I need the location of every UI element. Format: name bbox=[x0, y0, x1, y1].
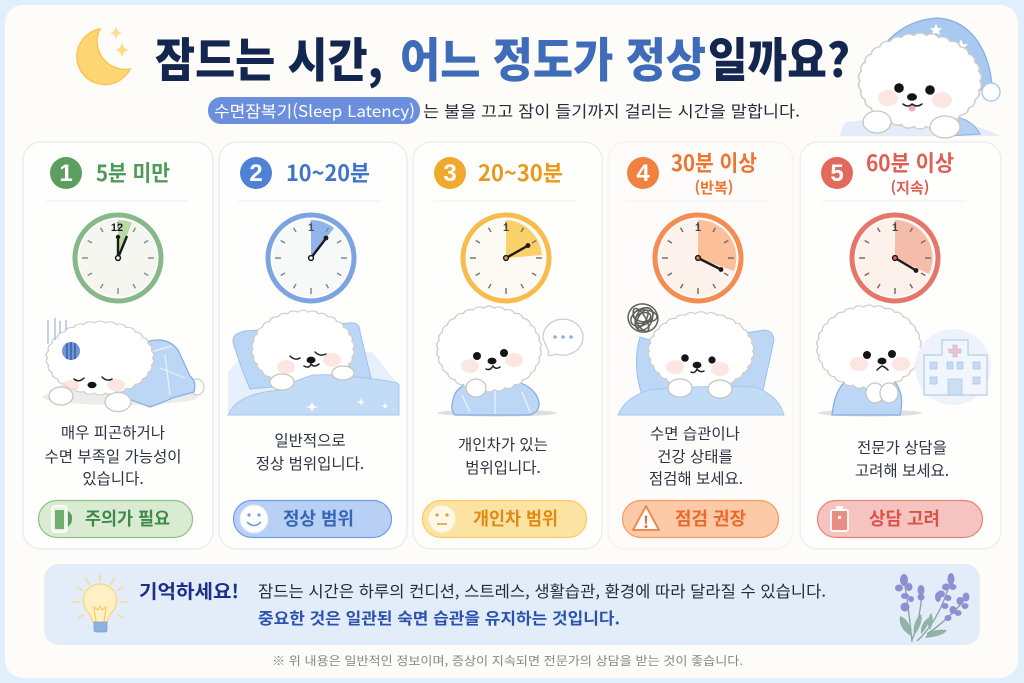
heading: 10~20분: 10~20분 bbox=[286, 156, 370, 188]
description bbox=[458, 433, 548, 478]
title bbox=[155, 22, 850, 91]
clock: 20 to 30 minutes: 1 bbox=[503, 222, 509, 234]
description: 고려해 보세요. bbox=[855, 459, 949, 481]
clock: over 60 minutes: 1 bbox=[892, 222, 898, 234]
footnote: ※ 위 내용은 일반적인 정보이며, 증상이 지속되면 전문가의 상담을 받는 것이 좋습니다. bbox=[272, 652, 743, 669]
description: 있습니다. bbox=[82, 467, 144, 489]
illustration: puppy asleep under blanket bbox=[228, 310, 399, 415]
description: 매우 피곤하거나 bbox=[61, 421, 165, 443]
step badge 3: 3 bbox=[443, 160, 457, 187]
step badge 3 bbox=[434, 157, 466, 189]
label: 점검 권장 bbox=[675, 505, 746, 531]
illustration: exhausted puppy lying down bbox=[42, 318, 204, 412]
icon: neutral face bbox=[428, 505, 456, 533]
step badge 2 bbox=[240, 157, 272, 189]
clock: about 5 minutes bbox=[75, 215, 161, 301]
clock: over 60 minutes bbox=[852, 215, 938, 301]
icon: warning triangle: ! bbox=[643, 509, 649, 533]
icon: warning triangle bbox=[633, 506, 659, 533]
title: 일까요? bbox=[708, 22, 850, 91]
title: 잠드는 시간, bbox=[155, 22, 383, 91]
illustration: pondering puppy bbox=[437, 306, 583, 416]
clock: over 30 minutes: 1 bbox=[695, 222, 701, 234]
illustration: worried puppy in bed bbox=[618, 300, 784, 415]
description: 일반적으로 bbox=[274, 429, 346, 451]
icon: low battery bbox=[52, 506, 72, 532]
icon: medical bag bbox=[831, 506, 848, 531]
step badge 5: 5 bbox=[830, 160, 844, 187]
icon: smiling face bbox=[240, 505, 268, 533]
illustration: lavender sprig bbox=[895, 573, 970, 642]
panel: card 1, under 5 minutes bbox=[23, 142, 213, 549]
subtitle with highlighted term bbox=[208, 97, 800, 124]
description: 전문가 상담을 bbox=[857, 436, 947, 458]
panel: card 2, 10 to 20 minutes bbox=[219, 142, 407, 549]
description: 범위입니다. bbox=[465, 456, 541, 478]
description: 점검해 보세요. bbox=[649, 467, 743, 489]
clock: over 30 minutes bbox=[655, 215, 741, 301]
subtitle with highlighted term: 수면잠복기(Sleep Latency) bbox=[214, 98, 415, 122]
clock: 10 to 20 minutes bbox=[268, 215, 354, 301]
icon: light bulb bbox=[73, 575, 127, 632]
description: 정상 범위입니다. bbox=[256, 452, 364, 474]
description bbox=[44, 421, 182, 489]
body text: 중요한 것은 일관된 숙면 습관을 유지하는 것입니다. bbox=[258, 605, 620, 629]
clock: 10 to 20 minutes: 1 bbox=[308, 222, 314, 234]
subtitle with highlighted term: 는 불을 끄고 잠이 들기까지 걸리는 시간을 말합니다. bbox=[423, 98, 800, 122]
icon: hospital bbox=[915, 329, 991, 405]
icon: tangled scribble bbox=[624, 300, 662, 336]
status pill: 개인차 범위 bbox=[422, 500, 586, 538]
clock: 20 to 30 minutes bbox=[463, 215, 549, 301]
description bbox=[855, 436, 949, 481]
body text: 잠드는 시간은 하루의 컨디션, 스트레스, 생활습관, 환경에 따라 달라질 수 있습니다. bbox=[258, 578, 826, 602]
heading: 60분 이상 (지속): (지속) bbox=[891, 177, 929, 198]
speech bubble bbox=[543, 319, 583, 355]
heading: 30분 이상 (반복): 30분 이상 bbox=[671, 146, 757, 178]
label: 개인차 범위 bbox=[473, 505, 558, 531]
heading: 30분 이상 (반복) bbox=[671, 146, 757, 198]
heading: 5분 미만: 5분 미만 bbox=[96, 156, 170, 188]
description bbox=[256, 429, 364, 474]
heading: 기억하세요! bbox=[139, 577, 239, 604]
step badge 5 bbox=[821, 157, 853, 189]
description: 수면 부족일 가능성이 bbox=[44, 445, 182, 467]
panel: remember callout bbox=[44, 564, 980, 645]
label: 정상 범위 bbox=[283, 505, 354, 531]
step badge 4: 4 bbox=[636, 160, 650, 187]
step badge 1 bbox=[50, 157, 82, 189]
clock: about 5 minutes: 12 bbox=[111, 222, 123, 234]
title: 어느 정도가 정상 bbox=[400, 22, 706, 91]
description bbox=[649, 422, 743, 489]
description: 건강 상태를 bbox=[657, 445, 733, 467]
status pill: 점검 권장 bbox=[622, 500, 778, 538]
label: 주의가 필요 bbox=[85, 505, 170, 531]
panel: card 4, 30+ minutes repeated bbox=[608, 142, 793, 549]
step badge 1: 1 bbox=[59, 160, 73, 187]
step badge 4 bbox=[627, 157, 659, 189]
panel: card 5, 60+ minutes sustained bbox=[800, 142, 1001, 549]
heading: 60분 이상 (지속): 60분 이상 bbox=[866, 146, 954, 178]
body text bbox=[258, 578, 826, 629]
illustration: puppy with hands clasped beside hospital bbox=[817, 305, 991, 416]
step badge 2: 2 bbox=[249, 160, 263, 187]
status pill: 주의가 필요 bbox=[38, 500, 192, 538]
label: 상담 고려 bbox=[869, 505, 940, 531]
panel: card 3, 20 to 30 minutes bbox=[413, 142, 602, 549]
heading: 30분 이상 (반복): (반복) bbox=[695, 177, 733, 198]
heading: 60분 이상 (지속) bbox=[866, 146, 954, 198]
status pill: 정상 범위 bbox=[234, 500, 392, 538]
description: 수면 습관이나 bbox=[650, 422, 740, 444]
heading: 20~30분: 20~30분 bbox=[478, 156, 563, 188]
description: 개인차가 있는 bbox=[458, 433, 548, 455]
illustration: puppy in nightcap bbox=[840, 18, 1000, 138]
icon: crescent moon with sparkles bbox=[77, 26, 130, 85]
status pill: 상담 고려 bbox=[818, 500, 982, 538]
